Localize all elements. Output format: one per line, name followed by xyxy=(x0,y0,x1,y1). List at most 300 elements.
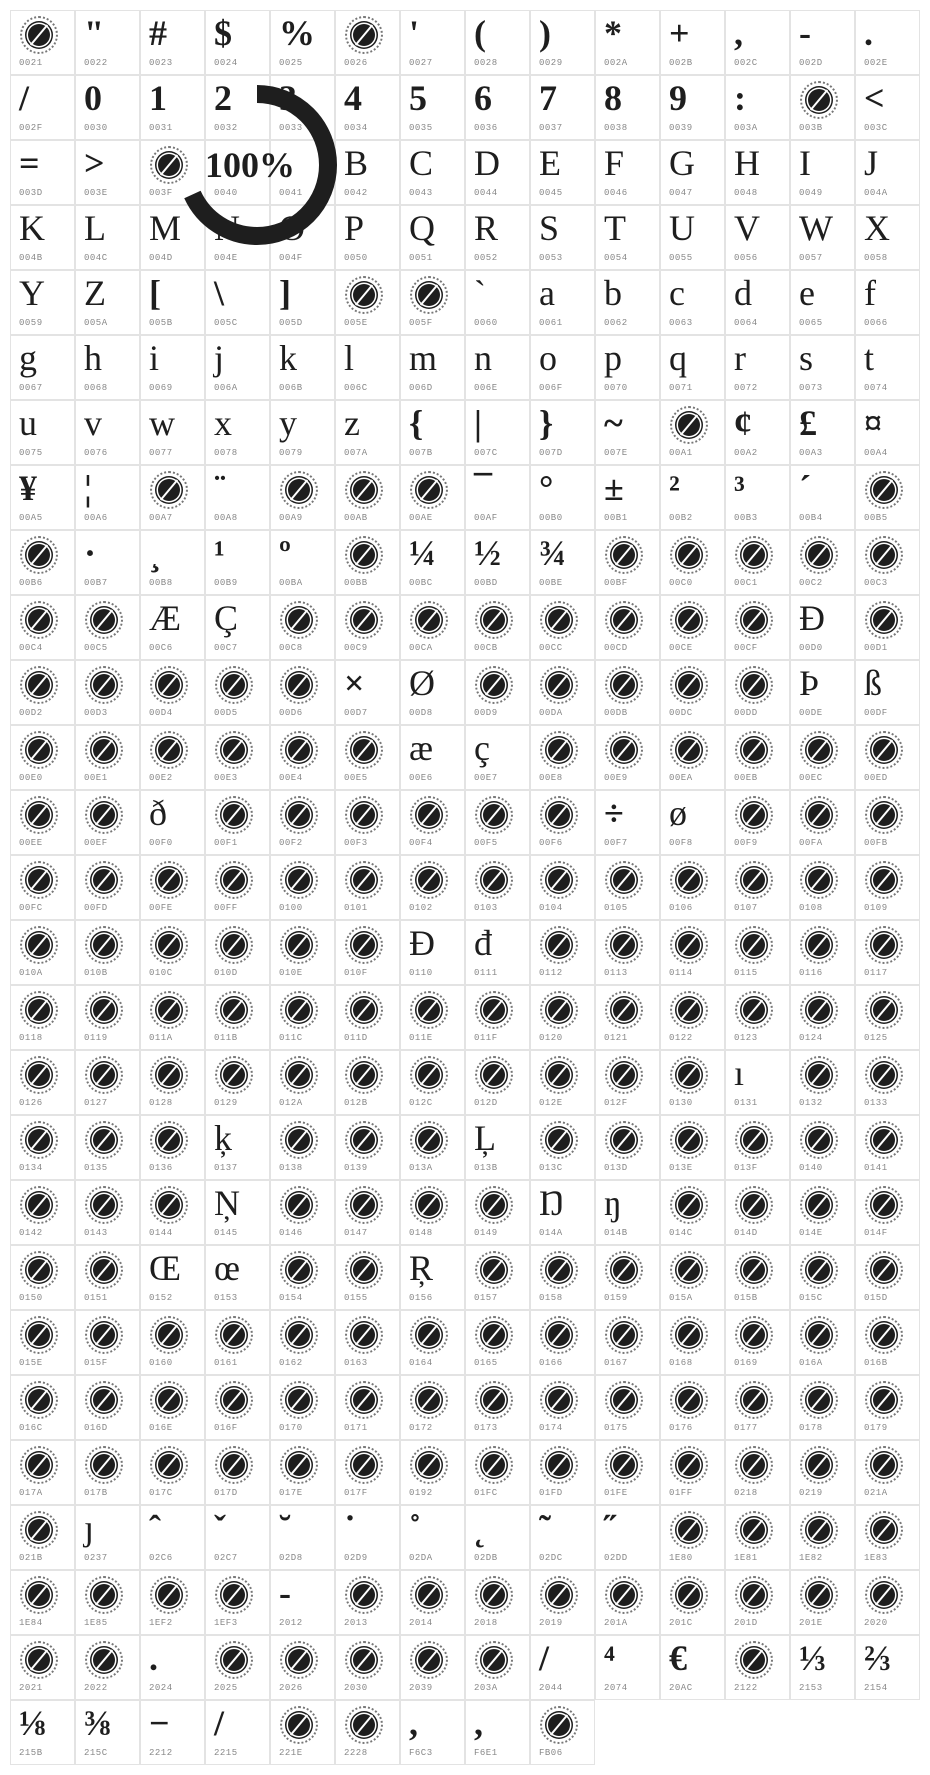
row 20: 015A xyxy=(669,1293,693,1303)
row 1: % xyxy=(279,13,315,53)
row 22: 0173 xyxy=(474,1423,498,1433)
row 14: 0104 xyxy=(539,903,563,913)
row 11: 00D4 xyxy=(149,708,173,718)
row 17: 0128 xyxy=(149,1098,173,1108)
row 10: 00CD xyxy=(604,643,628,653)
row 2: 003B xyxy=(799,123,823,133)
row 12: 00E2 xyxy=(149,773,173,783)
row 24: 02DB xyxy=(474,1553,498,1563)
row 22: 016F xyxy=(214,1423,238,1433)
row 9: ½ xyxy=(474,533,501,573)
row 2: 0 xyxy=(84,78,102,118)
row 18: 0140 xyxy=(799,1163,823,1173)
row 24: ˜ xyxy=(539,1508,551,1548)
row 14: 00FF xyxy=(214,903,238,913)
row 16: 011C xyxy=(279,1033,303,1043)
row 19: Ŋ xyxy=(539,1183,564,1223)
row 22: 016C xyxy=(19,1423,43,1433)
row 11: 00DD xyxy=(734,708,758,718)
row 6: l xyxy=(344,338,354,378)
row 12: 00EB xyxy=(734,773,758,783)
row 22: 0172 xyxy=(409,1423,433,1433)
row 3: E xyxy=(539,143,561,183)
row 26: ⁴ xyxy=(604,1638,615,1678)
row 10: 00CA xyxy=(409,643,433,653)
row 2: 2 xyxy=(214,78,232,118)
row 8: ¥ xyxy=(19,468,37,508)
row 4: 0054 xyxy=(604,253,628,263)
row 14: 0102 xyxy=(409,903,433,913)
row 7: 0077 xyxy=(149,448,173,458)
row 9: ¼ xyxy=(409,533,436,573)
row 5: Z xyxy=(84,273,106,313)
row 20: 0153 xyxy=(214,1293,238,1303)
row 6: m xyxy=(409,338,437,378)
row 24: ˛ xyxy=(474,1508,486,1548)
row 16: 011E xyxy=(409,1033,433,1043)
row 24: 021B xyxy=(19,1553,43,1563)
row 12: 00E0 xyxy=(19,773,43,783)
row 4: 0052 xyxy=(474,253,498,263)
row 3: F xyxy=(604,143,624,183)
row 10: 00C6 xyxy=(149,643,173,653)
row 10: 00D0 xyxy=(799,643,823,653)
row 24: 02DC xyxy=(539,1553,563,1563)
row 12: 00E3 xyxy=(214,773,238,783)
row 8: 00B3 xyxy=(734,513,758,523)
row 4: 0055 xyxy=(669,253,693,263)
row 16: 0118 xyxy=(19,1033,43,1043)
row 24: 02DA xyxy=(409,1553,433,1563)
row 2: 002F xyxy=(19,123,43,133)
row 14: 0109 xyxy=(864,903,888,913)
row 23: 01FD xyxy=(539,1488,563,1498)
row 4: N xyxy=(214,208,240,248)
row 18: 0137 xyxy=(214,1163,238,1173)
row 11: 00D9 xyxy=(474,708,498,718)
row 12: 00E6 xyxy=(409,773,433,783)
row 18: 013C xyxy=(539,1163,563,1173)
row 19: 014C xyxy=(669,1228,693,1238)
row 26: 2025 xyxy=(214,1683,238,1693)
row 7: 007C xyxy=(474,448,498,458)
row 4: 0057 xyxy=(799,253,823,263)
row 27: 221E xyxy=(279,1748,303,1758)
row 4: 004C xyxy=(84,253,108,263)
row 2: 4 xyxy=(344,78,362,118)
row 7: 007D xyxy=(539,448,563,458)
row 7: 00A2 xyxy=(734,448,758,458)
row 16: 0120 xyxy=(539,1033,563,1043)
row 4: 0058 xyxy=(864,253,888,263)
row 8: 00B2 xyxy=(669,513,693,523)
row 9: 00B7 xyxy=(84,578,108,588)
row 3: 0043 xyxy=(409,188,433,198)
row 5: 005D xyxy=(279,318,303,328)
row 3: 003D xyxy=(19,188,43,198)
row 13: 00F1 xyxy=(214,838,238,848)
row 6: 006B xyxy=(279,383,303,393)
row 4: 004E xyxy=(214,253,238,263)
row 11: 00DE xyxy=(799,708,823,718)
row 23: 021A xyxy=(864,1488,888,1498)
row 16: 0122 xyxy=(669,1033,693,1043)
row 9: ¾ xyxy=(539,533,566,573)
row 12: 00EA xyxy=(669,773,693,783)
row 2: 6 xyxy=(474,78,492,118)
row 21: 016B xyxy=(864,1358,888,1368)
row 27: 2228 xyxy=(344,1748,368,1758)
row 8: 00A7 xyxy=(149,513,173,523)
row 15: 010C xyxy=(149,968,173,978)
row 21: 0163 xyxy=(344,1358,368,1368)
row 1: 0022 xyxy=(84,58,108,68)
row 18: 0136 xyxy=(149,1163,173,1173)
row 11: 00DC xyxy=(669,708,693,718)
row 26: 2122 xyxy=(734,1683,758,1693)
row 10: 00C9 xyxy=(344,643,368,653)
row 17: 012F xyxy=(604,1098,628,1108)
row 20: 0159 xyxy=(604,1293,628,1303)
row 11: 00D7 xyxy=(344,708,368,718)
row 10: 00D1 xyxy=(864,643,888,653)
row 15: 010B xyxy=(84,968,108,978)
row 15: 010A xyxy=(19,968,43,978)
row 2: 0030 xyxy=(84,123,108,133)
row 1: 002C xyxy=(734,58,758,68)
row 17: 0132 xyxy=(799,1098,823,1108)
row 17: 012A xyxy=(279,1098,303,1108)
row 3: D xyxy=(474,143,500,183)
row 17 xyxy=(10,1050,920,1115)
row 26: 2074 xyxy=(604,1683,628,1693)
row 18: 0139 xyxy=(344,1163,368,1173)
row 18: 0135 xyxy=(84,1163,108,1173)
row 5: 0061 xyxy=(539,318,563,328)
row 14: 0107 xyxy=(734,903,758,913)
row 9: 00B9 xyxy=(214,578,238,588)
row 23: 017B xyxy=(84,1488,108,1498)
row 19: 014E xyxy=(799,1228,823,1238)
row 15: đ xyxy=(474,923,492,963)
row 13: 00F8 xyxy=(669,838,693,848)
row 10: 00CE xyxy=(669,643,693,653)
row 14: 0103 xyxy=(474,903,498,913)
row 22 xyxy=(10,1375,920,1440)
row 15: 0115 xyxy=(734,968,758,978)
row 26: / xyxy=(539,1638,549,1678)
row 11: ß xyxy=(864,663,882,703)
row 2: 1 xyxy=(149,78,167,118)
row 9: 00C2 xyxy=(799,578,823,588)
row 6 xyxy=(10,335,920,400)
row 7: | xyxy=(474,403,482,443)
row 3: H xyxy=(734,143,760,183)
row 5: 005F xyxy=(409,318,433,328)
row 6: 0072 xyxy=(734,383,758,393)
row 24: 0237 xyxy=(84,1553,108,1563)
row 2: 9 xyxy=(669,78,687,118)
row 17: 0130 xyxy=(669,1098,693,1108)
row 19: 014A xyxy=(539,1228,563,1238)
row 5: 0066 xyxy=(864,318,888,328)
row 5: b xyxy=(604,273,622,313)
row 3: 003F xyxy=(149,188,173,198)
row 2: 3 xyxy=(279,78,297,118)
row 8: 00AF xyxy=(474,513,498,523)
row 5: 0063 xyxy=(669,318,693,328)
row 9: 00C3 xyxy=(864,578,888,588)
row 1: , xyxy=(734,13,743,53)
row 4: 0050 xyxy=(344,253,368,263)
row 1: 002A xyxy=(604,58,628,68)
row 12: 00ED xyxy=(864,773,888,783)
row 6: 0070 xyxy=(604,383,628,393)
row 19: 0143 xyxy=(84,1228,108,1238)
row 7: z xyxy=(344,403,360,443)
row 18: ķ xyxy=(214,1118,232,1158)
row 8: ³ xyxy=(734,468,745,508)
row 20: 0157 xyxy=(474,1293,498,1303)
row 21: 015E xyxy=(19,1358,43,1368)
row 8: ¯ xyxy=(474,468,492,508)
row 7: y xyxy=(279,403,297,443)
row 21: 0162 xyxy=(279,1358,303,1368)
row 21: 0160 xyxy=(149,1358,173,1368)
row 23: 0219 xyxy=(799,1488,823,1498)
row 11: 00DF xyxy=(864,708,888,718)
row 23: 017E xyxy=(279,1488,303,1498)
row 2: 0033 xyxy=(279,123,303,133)
row 24: ˘ xyxy=(279,1508,291,1548)
row 3: J xyxy=(864,143,878,183)
row 3: 0041 xyxy=(279,188,303,198)
row 1: 002D xyxy=(799,58,823,68)
row 23: 01FE xyxy=(604,1488,628,1498)
row 18: 013F xyxy=(734,1163,758,1173)
row 6: j xyxy=(214,338,224,378)
row 14: 0101 xyxy=(344,903,368,913)
row 4: 004F xyxy=(279,253,303,263)
row 4: 004B xyxy=(19,253,43,263)
row 5: 005C xyxy=(214,318,238,328)
row 4: R xyxy=(474,208,498,248)
row 21: 0167 xyxy=(604,1358,628,1368)
row 20: œ xyxy=(214,1248,240,1288)
row 19: 014B xyxy=(604,1228,628,1238)
row 6: o xyxy=(539,338,557,378)
row 6: s xyxy=(799,338,813,378)
row 3 xyxy=(10,140,920,205)
row 7: 0076 xyxy=(84,448,108,458)
row 25: 2012 xyxy=(279,1618,303,1628)
row 3: 0048 xyxy=(734,188,758,198)
row 20: 0150 xyxy=(19,1293,43,1303)
row 9: 00BE xyxy=(539,578,563,588)
row 5: 005B xyxy=(149,318,173,328)
row 10: 00C5 xyxy=(84,643,108,653)
row 27: − xyxy=(149,1703,170,1743)
row 21: 015F xyxy=(84,1358,108,1368)
row 22: 0176 xyxy=(669,1423,693,1433)
row 13 xyxy=(10,790,920,855)
row 6: n xyxy=(474,338,492,378)
row 7: } xyxy=(539,403,553,443)
row 21: 0169 xyxy=(734,1358,758,1368)
row 14: 0108 xyxy=(799,903,823,913)
row 11: 00D2 xyxy=(19,708,43,718)
row 21: 0166 xyxy=(539,1358,563,1368)
row 1: 0023 xyxy=(149,58,173,68)
row 5: 005E xyxy=(344,318,368,328)
row 13: 00F3 xyxy=(344,838,368,848)
row 13: 00F6 xyxy=(539,838,563,848)
row 4: W xyxy=(799,208,833,248)
row 10: 00CF xyxy=(734,643,758,653)
row 6: 006D xyxy=(409,383,433,393)
row 12: 00E9 xyxy=(604,773,628,783)
row 26: 2030 xyxy=(344,1683,368,1693)
row 3: > xyxy=(84,143,105,183)
row 8: ¦ xyxy=(84,468,92,508)
row 13: ÷ xyxy=(604,793,624,833)
row 23: 0218 xyxy=(734,1488,758,1498)
row 3: I xyxy=(799,143,811,183)
row 5: ] xyxy=(279,273,291,313)
row 8: ¨ xyxy=(214,468,226,508)
row 5: 0064 xyxy=(734,318,758,328)
row 2: 5 xyxy=(409,78,427,118)
row 6: 0071 xyxy=(669,383,693,393)
row 20: Ŗ xyxy=(409,1248,433,1288)
row 1: ) xyxy=(539,13,551,53)
row 10 xyxy=(10,595,920,660)
row 7: 00A1 xyxy=(669,448,693,458)
row 5: e xyxy=(799,273,815,313)
row 3: C xyxy=(409,143,433,183)
row 11: Ø xyxy=(409,663,435,703)
row 25: 2018 xyxy=(474,1618,498,1628)
row 8: 00A6 xyxy=(84,513,108,523)
row 24: 02DD xyxy=(604,1553,628,1563)
row 8: ´ xyxy=(799,468,811,508)
row 15: 0117 xyxy=(864,968,888,978)
row 5: f xyxy=(864,273,876,313)
row 7: 007B xyxy=(409,448,433,458)
row 24: ˙ xyxy=(344,1508,356,1548)
row 22: 0170 xyxy=(279,1423,303,1433)
row 27: 215C xyxy=(84,1748,108,1758)
row 25: 2013 xyxy=(344,1618,368,1628)
row 7: w xyxy=(149,403,175,443)
row 7 xyxy=(10,400,920,465)
row 22: 0177 xyxy=(734,1423,758,1433)
row 7: { xyxy=(409,403,423,443)
row 16: 0119 xyxy=(84,1033,108,1043)
row 14: 0100 xyxy=(279,903,303,913)
row 17: 0129 xyxy=(214,1098,238,1108)
row 15: 0112 xyxy=(539,968,563,978)
row 23: 01FC xyxy=(474,1488,498,1498)
row 18: 0141 xyxy=(864,1163,888,1173)
row 3: G xyxy=(669,143,695,183)
row 21: 016A xyxy=(799,1358,823,1368)
row 1: ( xyxy=(474,13,486,53)
row 20: Œ xyxy=(149,1248,181,1288)
row 26: € xyxy=(669,1638,687,1678)
row 25: 1E85 xyxy=(84,1618,108,1628)
row 9: 00B6 xyxy=(19,578,43,588)
row 22: 0178 xyxy=(799,1423,823,1433)
row 18: 0134 xyxy=(19,1163,43,1173)
row 1: - xyxy=(799,13,811,53)
row 11: 00D5 xyxy=(214,708,238,718)
row 10: 00CB xyxy=(474,643,498,653)
row 18: 013A xyxy=(409,1163,433,1173)
row 14: 0105 xyxy=(604,903,628,913)
row 19: 0146 xyxy=(279,1228,303,1238)
row 18: 013D xyxy=(604,1163,628,1173)
row 2: < xyxy=(864,78,885,118)
row 1: . xyxy=(864,13,873,53)
row 3: 0049 xyxy=(799,188,823,198)
row 2: 0031 xyxy=(149,123,173,133)
row 7: ~ xyxy=(604,403,623,443)
row 19: ŋ xyxy=(604,1183,622,1223)
row 23: 0192 xyxy=(409,1488,433,1498)
row 22: 0179 xyxy=(864,1423,888,1433)
row 27: ⅜ xyxy=(84,1703,111,1743)
row 24: 1E82 xyxy=(799,1553,823,1563)
row 26 xyxy=(10,1635,920,1700)
row 10: 00C7 xyxy=(214,643,238,653)
row 26: 2022 xyxy=(84,1683,108,1693)
row 1: 0027 xyxy=(409,58,433,68)
row 27: F6E1 xyxy=(474,1748,498,1758)
row 21: 0161 xyxy=(214,1358,238,1368)
row 27: , xyxy=(474,1703,483,1743)
row 26: 2154 xyxy=(864,1683,888,1693)
row 23 xyxy=(10,1440,920,1505)
row 18: 013B xyxy=(474,1163,498,1173)
row 19: 0145 xyxy=(214,1228,238,1238)
row 4 xyxy=(10,205,920,270)
row 12: 00E1 xyxy=(84,773,108,783)
row 5: Y xyxy=(19,273,45,313)
row 5: [ xyxy=(149,273,161,313)
row 9: · xyxy=(84,533,96,573)
row 14 xyxy=(10,855,920,920)
row 19: 014F xyxy=(864,1228,888,1238)
row 16 xyxy=(10,985,920,1050)
row 17: 0133 xyxy=(864,1098,888,1108)
row 25: 201E xyxy=(799,1618,823,1628)
row 7: 0078 xyxy=(214,448,238,458)
row 7: ¢ xyxy=(734,403,752,443)
row 11: 00DB xyxy=(604,708,628,718)
row 1: 0025 xyxy=(279,58,303,68)
row 11: 00D6 xyxy=(279,708,303,718)
row 6: h xyxy=(84,338,102,378)
row 22: 0171 xyxy=(344,1423,368,1433)
row 8: 00A5 xyxy=(19,513,43,523)
row 12: ç xyxy=(474,728,490,768)
row 22: 0175 xyxy=(604,1423,628,1433)
row 5: 005A xyxy=(84,318,108,328)
row 12 xyxy=(10,725,920,790)
row 22: 0174 xyxy=(539,1423,563,1433)
row 12: 00EC xyxy=(799,773,823,783)
